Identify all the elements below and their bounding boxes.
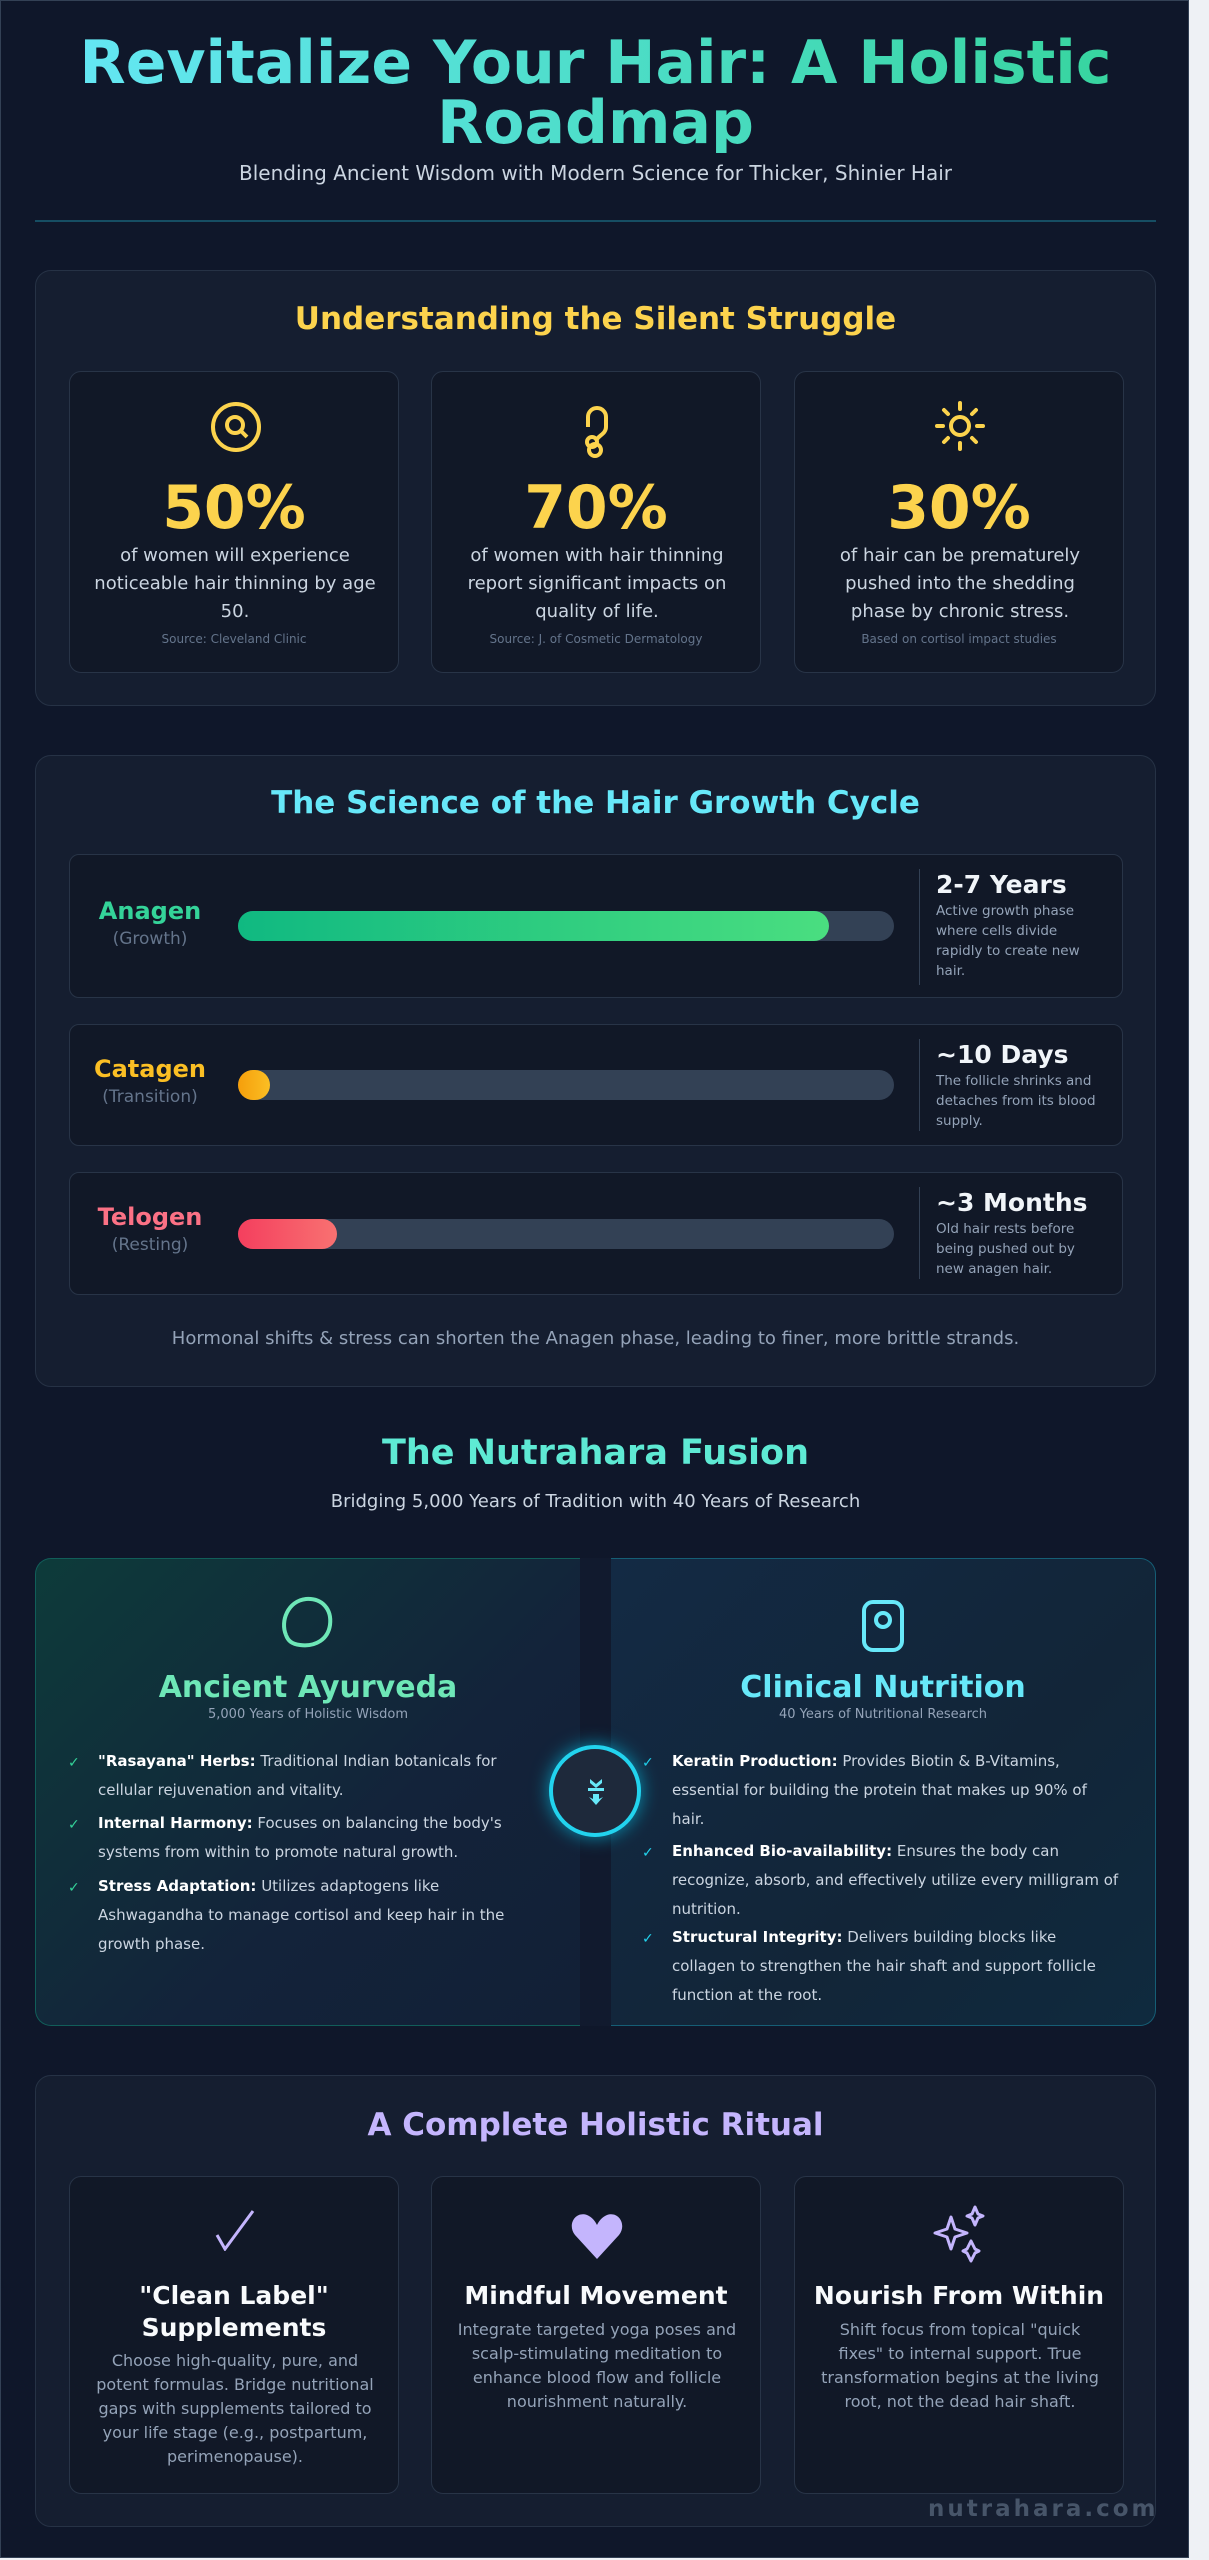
- card: nourish from within: [794, 2176, 1124, 2494]
- row: catagen: The follicle shrinks and detaches from its blood supply.: [936, 1073, 1096, 1129]
- row: catagen: ~10 Days: [936, 1040, 1068, 1069]
- card: 30%: [794, 371, 1124, 673]
- footer: nutrahara.com: nutrahara.com: [928, 2496, 1159, 2522]
- card: mindful movement: Mindful Movement: [464, 2281, 728, 2310]
- footnote: Hormonal shifts & stress can shorten the Anagen phase, leading to finer, more brittle strands.: [172, 1328, 1019, 1349]
- subtitle: fusion: Bridging 5,000 Years of Tradition with 40 Years of Research: [331, 1491, 860, 1512]
- row: catagen: (Transition): [102, 1087, 198, 1107]
- card: 70%: [431, 371, 761, 673]
- bar: anagen: [238, 911, 894, 941]
- card: 50%: of women will experience noticeable hair thinning by age 50.: [94, 545, 376, 622]
- list: clinical: [642, 1752, 1118, 2004]
- icon: fusion center circle: [549, 1745, 641, 1837]
- panel: ancient ayurveda: ✓: [68, 1817, 80, 1833]
- card: 50%: Source: Cleveland Clinic: [162, 632, 306, 646]
- panel: holistic ritual: [35, 2075, 1156, 2527]
- icon: strand: [585, 406, 608, 458]
- card: nourish from within: Nourish From Within: [814, 2281, 1104, 2310]
- list: ayurveda: [68, 1752, 504, 1953]
- panel: ancient ayurveda: ✓: [68, 1755, 80, 1771]
- list: clinical: Structural Integrity: Delivers building blocks like collagen to strengthen the hair shaft and support follicle function at the root.: [672, 1928, 1096, 2004]
- card: mindful movement: Integrate targeted yoga poses and scalp-stimulating meditation to enhance blood flow and follicle nourishment naturally.: [458, 2320, 736, 2411]
- row: telogen: (Resting): [112, 1235, 188, 1255]
- panel: ancient ayurveda: 5,000 Years of Holistic Wisdom: [208, 1707, 408, 1722]
- panel: clinical nutrition: 40 Years of Nutritional Research: [779, 1707, 987, 1722]
- card: 70%: of women with hair thinning report significant impacts on quality of life.: [468, 545, 726, 622]
- title: [1, 33, 1190, 153]
- title: Revitalize Your Hair: A Holistic: [80, 28, 1111, 98]
- icon: leaf circle: [282, 1596, 332, 1648]
- card: 70%: 70%: [524, 473, 668, 543]
- heading: Understanding the Silent Struggle: Understanding the Silent Struggle: [295, 301, 896, 337]
- row: anagen: Active growth phase where cells divide rapidly to create new hair.: [936, 903, 1080, 979]
- panel: clinical nutrition: ✓: [642, 1845, 654, 1861]
- icon: heart: [572, 2214, 622, 2259]
- bar: catagen: [238, 1070, 894, 1100]
- card: 30%: 30%: [887, 473, 1031, 543]
- card: mindful movement: [431, 2176, 761, 2494]
- panel: hair growth cycle: [35, 755, 1156, 1387]
- icon: capsule: [862, 1600, 904, 1652]
- icon: check: [216, 2210, 254, 2251]
- list: clinical: Keratin Production: Provides Biotin & B-Vitamins, essential for building the protein that makes up 90% of hair.: [672, 1752, 1087, 1828]
- row: catagen: Catagen: [94, 1055, 206, 1083]
- panel: clinical nutrition: [611, 1558, 1156, 2026]
- row: anagen: [69, 854, 1123, 998]
- heading: A Complete Holistic Ritual: A Complete Holistic Ritual: [367, 2107, 824, 2143]
- card: clean label: Supplements: [142, 2313, 326, 2342]
- card: 50%: [69, 371, 399, 673]
- panel: silent struggle: [35, 270, 1156, 706]
- heading: Clinical Nutrition: Clinical Nutrition: [740, 1670, 1026, 1705]
- heading: The Science of the Hair Growth Cycle: The Science of the Hair Growth Cycle: [271, 785, 920, 821]
- list: ayurveda: "Rasayana" Herbs: Traditional Indian botanicals for cellular rejuvenation and vitality.: [98, 1752, 497, 1799]
- heading: The Nutrahara Fusion: The Nutrahara Fusion: [382, 1433, 809, 1473]
- row: anagen: Anagen: [99, 897, 201, 925]
- row: anagen: (Growth): [113, 929, 187, 949]
- card: 50%: 50%: [162, 473, 306, 543]
- card: 70%: Source: J. of Cosmetic Dermatology: [490, 632, 702, 646]
- list: ayurveda: Stress Adaptation: Utilizes adaptogens like Ashwagandha to manage cortisol and keep hair in the growth phase.: [98, 1877, 504, 1953]
- row: telogen: Telogen: [98, 1203, 202, 1231]
- row: catagen: [69, 1024, 1123, 1146]
- row: telogen: [69, 1172, 1123, 1295]
- title: Roadmap: [437, 88, 754, 158]
- row: telogen: Old hair rests before being pushed out by new anagen hair.: [936, 1221, 1075, 1277]
- icon: sparkles: [934, 2206, 984, 2263]
- row: telogen: ~3 Months: [936, 1188, 1088, 1217]
- card: 30%: of hair can be prematurely pushed into the shedding phase by chronic stress.: [840, 545, 1080, 622]
- list: clinical: Enhanced Bio-availability: Ensures the body can recognize, absorb, and effectively utilize every milligram of nutrition.: [672, 1842, 1118, 1918]
- card: 30%: Based on cortisol impact studies: [861, 632, 1057, 646]
- icon: sun: [935, 401, 985, 451]
- panel: ancient ayurveda: ✓: [68, 1880, 80, 1896]
- panel: ancient ayurveda: [35, 1558, 580, 2026]
- panel: clinical nutrition: ✓: [642, 1931, 654, 1947]
- heading: Ancient Ayurveda: Ancient Ayurveda: [159, 1670, 457, 1705]
- bar: telogen: [238, 1219, 894, 1249]
- card: clean label: "Clean Label": [139, 2281, 329, 2310]
- card: clean label: Choose high-quality, pure, and potent formulas. Bridge nutritional gaps with supplements tailored to your life stage (e.g., postpartum, perimenopause).: [96, 2351, 374, 2466]
- panel: clinical nutrition: ✓: [642, 1755, 654, 1771]
- list: ayurveda: Internal Harmony: Focuses on balancing the body's systems from within to promote natural growth.: [98, 1814, 502, 1861]
- row: anagen: 2-7 Years: [936, 870, 1067, 899]
- card: clean label: [69, 2176, 399, 2494]
- icon: magnifier: [211, 402, 261, 452]
- card: nourish from within: Shift focus from topical "quick fixes" to internal support. True transformation begins at the living root, not the dead hair shaft.: [821, 2320, 1099, 2411]
- subtitle: Blending Ancient Wisdom with Modern Science for Thicker, Shinier Hair: [239, 161, 952, 185]
